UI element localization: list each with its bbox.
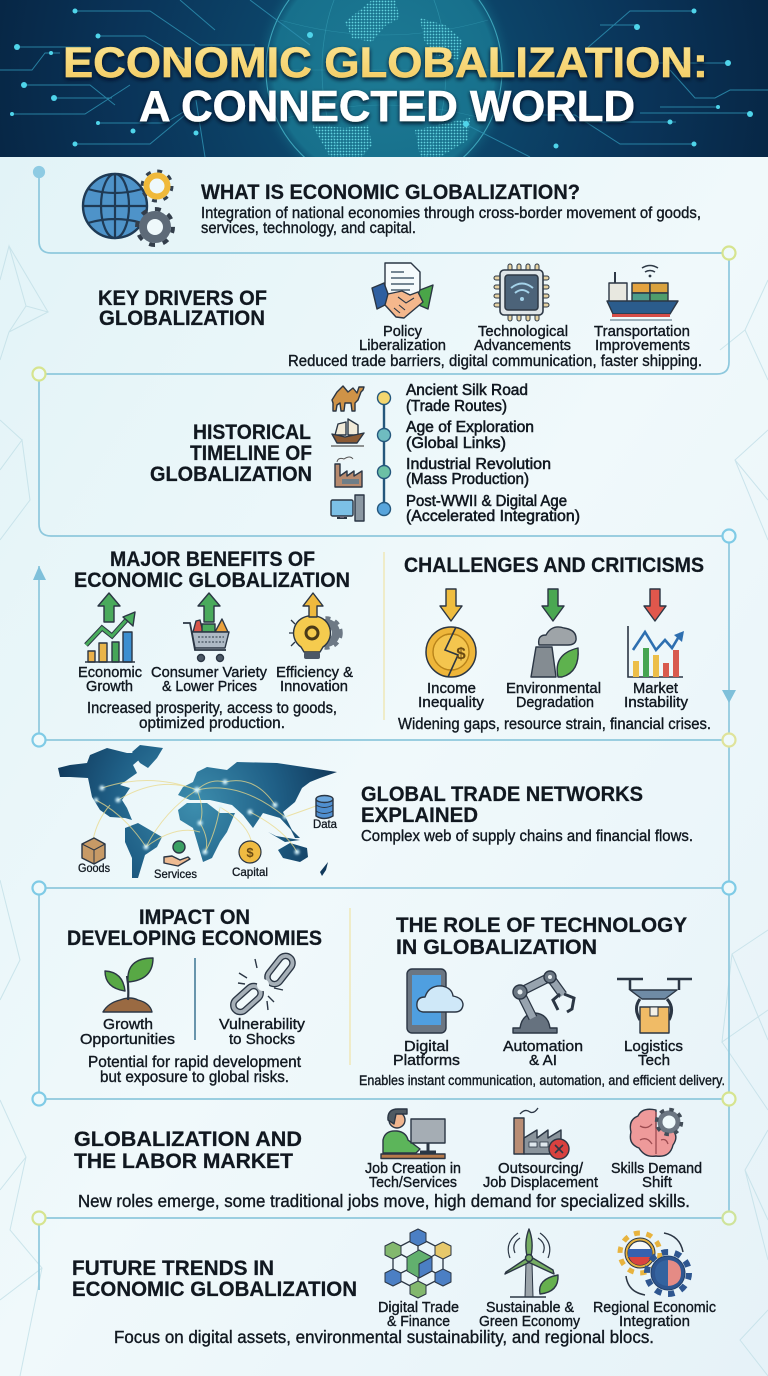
icon: income inequality xyxy=(426,589,476,677)
icon: lightbulb and gear xyxy=(289,593,341,659)
icon: market instability xyxy=(628,589,684,677)
title xyxy=(63,46,707,128)
header circuit nodes xyxy=(10,8,753,148)
icon: data cylinder xyxy=(316,796,333,818)
timeline labels: (Mass Production) xyxy=(406,471,529,488)
labels: Digital xyxy=(404,1038,449,1055)
timeline labels: Age of Exploration xyxy=(406,419,534,436)
divider xyxy=(349,908,351,1065)
challenge labels: Market xyxy=(633,680,679,697)
icon: computer xyxy=(331,495,364,521)
map labels: Data xyxy=(313,817,337,831)
icon: chip xyxy=(494,264,549,321)
challenge labels: Income xyxy=(427,680,476,697)
panel: role of technology xyxy=(359,914,725,1088)
heading: GLOBALIZATION xyxy=(150,463,312,486)
panel: what is economic globalization xyxy=(83,171,701,245)
description xyxy=(201,205,701,237)
labels: Tech/Services xyxy=(369,1174,457,1191)
benefit labels: Innovation xyxy=(280,678,348,695)
driver labels xyxy=(359,323,690,354)
heading: THE ROLE OF TECHNOLOGY xyxy=(396,914,687,937)
icon: income inequality: $ xyxy=(456,644,466,663)
heading: GLOBAL TRADE NETWORKS xyxy=(361,783,643,806)
benefit labels: Growth xyxy=(86,678,133,695)
icon: worker at computer xyxy=(381,1109,445,1158)
icon: brain and gear xyxy=(630,1109,682,1156)
timeline dots xyxy=(378,392,390,516)
heading xyxy=(74,1128,302,1173)
driver labels: Transportation xyxy=(594,323,690,340)
heading: IMPACT ON xyxy=(139,906,250,929)
panel: developing economies xyxy=(67,906,322,1086)
heading xyxy=(67,906,322,950)
labels: & AI xyxy=(529,1052,557,1069)
labels: Regional Economic xyxy=(593,1299,716,1316)
labels xyxy=(80,1016,306,1048)
description: Complex web of supply chains and financial flows. xyxy=(361,828,693,845)
heading: FUTURE TRENDS IN xyxy=(72,1257,274,1280)
challenge labels: Inequality xyxy=(418,694,485,711)
heading: ECONOMIC GLOBALIZATION xyxy=(72,1278,357,1301)
panel: key drivers xyxy=(98,263,702,370)
timeline labels: Post-WWII & Digital Age xyxy=(406,493,567,510)
challenge labels xyxy=(418,680,689,711)
icon: globe and gears xyxy=(83,171,173,245)
timeline labels: (Trade Routes) xyxy=(406,398,507,415)
summary xyxy=(87,700,337,732)
labels: Automation xyxy=(503,1038,583,1055)
benefit labels: Efficiency & xyxy=(276,664,353,681)
icon: delivery drone xyxy=(617,979,692,1033)
panel: challenges and criticisms xyxy=(398,554,711,733)
benefit labels: Economic xyxy=(78,664,142,681)
heading: EXPLAINED xyxy=(361,804,478,827)
icon: economic growth xyxy=(85,593,135,662)
description: Integration of national economies through cross-border movement of goods, xyxy=(201,205,701,222)
icon: goods box xyxy=(82,838,105,864)
heading: TIMELINE OF xyxy=(190,442,312,465)
icon: camel xyxy=(332,386,364,411)
labels xyxy=(365,1160,702,1191)
heading: GLOBALIZATION xyxy=(99,307,265,330)
benefit labels: Consumer Variety xyxy=(151,664,267,681)
heading xyxy=(74,548,350,592)
icon: services hand xyxy=(164,841,190,866)
heading xyxy=(150,421,312,486)
summary: Focus on digital assets, environmental sustainability, and regional blocs. xyxy=(114,1327,654,1347)
timeline labels: Ancient Silk Road xyxy=(406,382,528,399)
labels: Integration xyxy=(619,1313,690,1330)
summary: New roles emerge, some traditional jobs move, high demand for specialized skills. xyxy=(78,1191,690,1211)
heading: MAJOR BENEFITS OF xyxy=(110,548,315,571)
header globe xyxy=(262,0,506,157)
summary: but exposure to global risks. xyxy=(100,1069,289,1086)
heading xyxy=(98,287,267,330)
labels: to Shocks xyxy=(229,1031,295,1048)
icon: wind turbine xyxy=(505,1229,558,1297)
icon: phone and cloud xyxy=(407,969,463,1033)
driver labels: Liberalization xyxy=(359,337,446,354)
labels xyxy=(393,1038,683,1069)
icon: shopping cart xyxy=(183,593,229,662)
description: services, technology, and capital. xyxy=(201,220,416,237)
panel: major benefits xyxy=(74,548,353,732)
heading: WHAT IS ECONOMIC GLOBALIZATION? xyxy=(201,181,580,204)
heading: HISTORICAL xyxy=(193,421,311,444)
benefit labels xyxy=(78,664,353,695)
map labels xyxy=(78,817,337,881)
timeline axis xyxy=(383,398,385,509)
heading xyxy=(361,783,643,827)
heading xyxy=(396,914,687,959)
heading: ECONOMIC GLOBALIZATION xyxy=(74,569,350,592)
summary xyxy=(88,1054,302,1086)
icon: plant sprout xyxy=(103,958,153,1012)
connector nodes xyxy=(32,167,736,1224)
icon: capital coin xyxy=(239,841,261,863)
heading: THE LABOR MARKET xyxy=(74,1150,293,1173)
labels: Job Displacement xyxy=(483,1174,599,1191)
icon: regional integration gears xyxy=(620,1233,689,1295)
challenge labels: Instability xyxy=(624,694,689,711)
heading: KEY DRIVERS OF xyxy=(98,287,267,310)
labels: Job Creation in xyxy=(365,1160,461,1177)
heading: DEVELOPING ECONOMIES xyxy=(67,927,322,950)
icon: blockchain cubes xyxy=(385,1229,451,1298)
header banner xyxy=(0,0,768,157)
panel: labor market xyxy=(74,1108,702,1211)
world map xyxy=(58,745,337,878)
icon: factory xyxy=(335,457,362,487)
panel: global trade networks xyxy=(58,745,693,881)
driver labels: Policy xyxy=(383,323,422,340)
summary: Potential for rapid development xyxy=(88,1054,302,1071)
summary: Increased prosperity, access to goods, xyxy=(87,700,337,717)
labels: Shift xyxy=(642,1174,673,1191)
labels xyxy=(378,1299,716,1330)
labels: & Finance xyxy=(387,1313,450,1330)
heading: IN GLOBALIZATION xyxy=(396,936,597,959)
benefit labels: & Lower Prices xyxy=(162,678,257,695)
labels: Sustainable & xyxy=(486,1299,574,1316)
labels: Outsourcing/ xyxy=(498,1160,584,1177)
title: A CONNECTED WORLD xyxy=(139,82,635,131)
map labels: Goods xyxy=(78,861,110,875)
driver labels: Technological xyxy=(478,323,568,340)
icon: sailing ship xyxy=(331,419,364,446)
timeline labels xyxy=(406,382,580,525)
icon: cargo ship xyxy=(607,266,678,320)
icon: policy handshake xyxy=(372,263,433,318)
labels: Digital Trade xyxy=(378,1299,459,1316)
driver labels: Advancements xyxy=(474,337,571,354)
summary: Widening gaps, resource strain, financial crises. xyxy=(398,716,711,733)
icon: environmental degradation xyxy=(531,589,578,677)
labels: Tech xyxy=(638,1052,670,1069)
labels: Logistics xyxy=(624,1038,683,1055)
timeline labels: Industrial Revolution xyxy=(406,456,551,473)
header circuit lines xyxy=(0,0,768,157)
challenge labels: Degradation xyxy=(516,694,594,711)
timeline labels: (Global Links) xyxy=(406,435,506,452)
connector circuit lines xyxy=(33,172,736,1290)
icon: capital coin: $ xyxy=(246,845,254,860)
labels: Growth xyxy=(103,1016,153,1033)
heading: GLOBALIZATION AND xyxy=(74,1128,302,1151)
labels: Green Economy xyxy=(479,1313,580,1330)
timeline labels: (Accelerated Integration) xyxy=(406,508,580,525)
title: ECONOMIC GLOBALIZATION: xyxy=(63,39,708,87)
labels: Skills Demand xyxy=(611,1160,702,1177)
icon: robot arm xyxy=(513,971,574,1033)
summary: Enables instant communication, automation, and efficient delivery. xyxy=(359,1072,725,1088)
heading xyxy=(72,1257,357,1301)
challenge labels: Environmental xyxy=(506,680,601,697)
icon: broken chain xyxy=(230,953,295,1015)
labels: Vulnerability xyxy=(219,1016,306,1033)
driver labels: Improvements xyxy=(595,337,690,354)
heading: CHALLENGES AND CRITICISMS xyxy=(404,554,704,577)
labels: Platforms xyxy=(393,1052,460,1069)
summary: Reduced trade barriers, digital communication, faster shipping. xyxy=(288,353,702,370)
panel: historical timeline xyxy=(150,382,580,525)
labels: Opportunities xyxy=(80,1031,175,1048)
icon: factory with cross xyxy=(514,1108,569,1159)
map labels: Services xyxy=(154,867,197,881)
divider line xyxy=(194,958,196,1040)
map labels: Capital xyxy=(232,865,268,879)
panel: future trends xyxy=(72,1229,716,1347)
divider xyxy=(383,552,385,720)
connector arrows xyxy=(33,566,736,703)
summary: optimized production. xyxy=(139,715,285,732)
